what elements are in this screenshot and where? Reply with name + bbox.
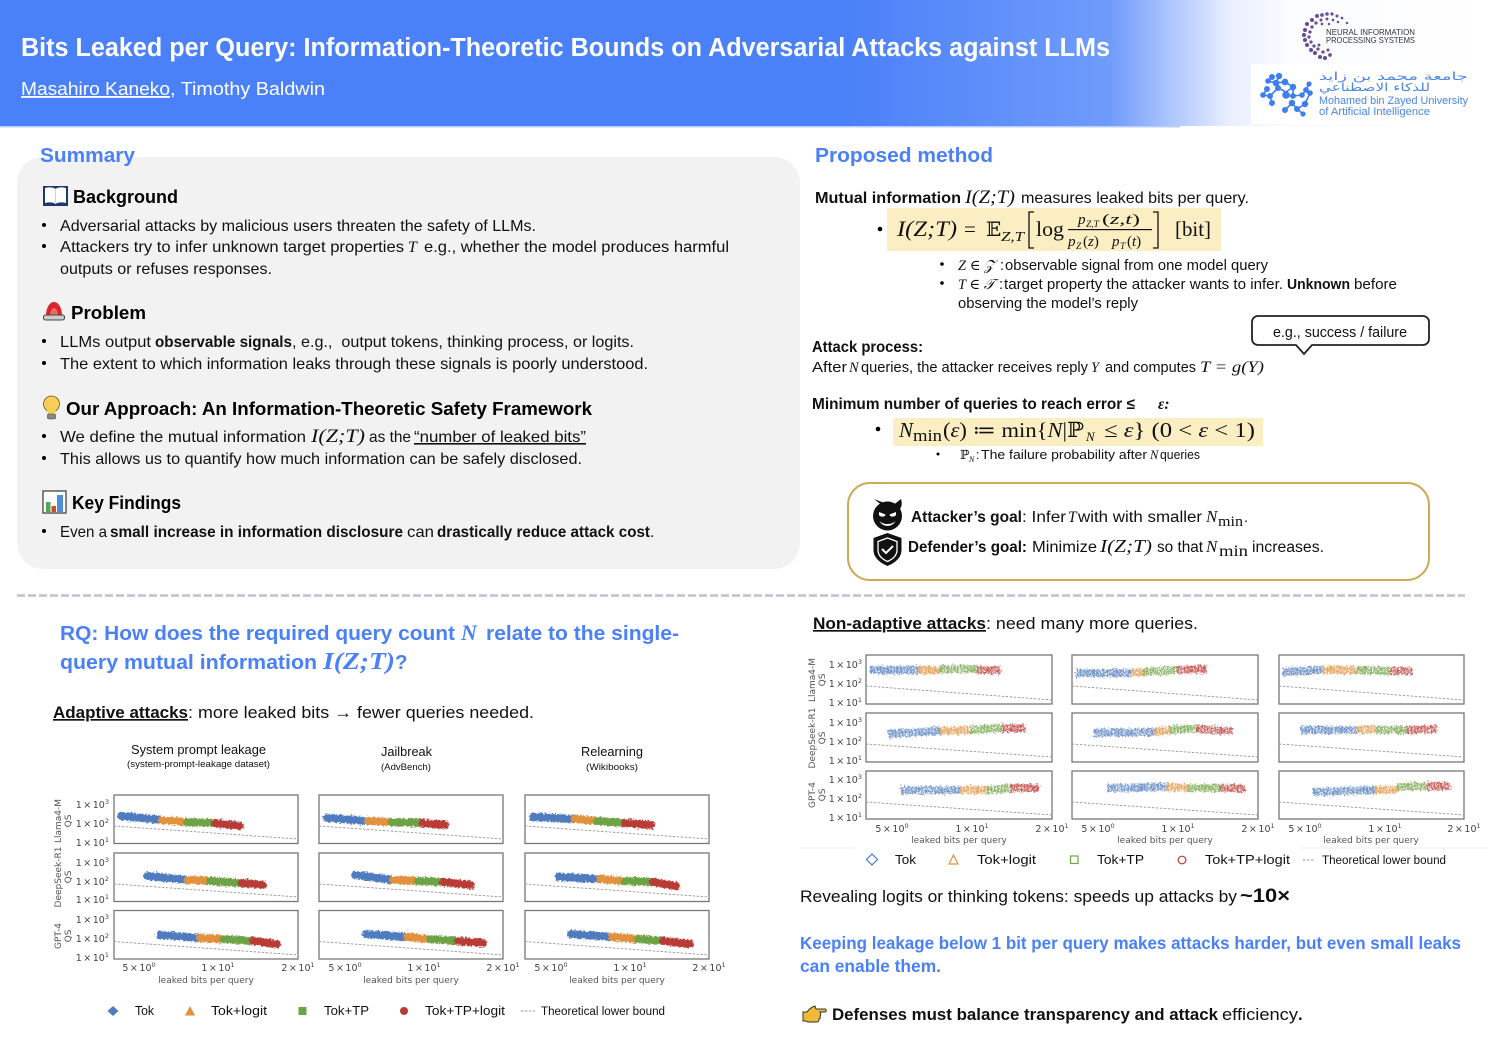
findings text [42,524,654,541]
research question: query mutual information [60,651,317,674]
x axis titles [158,976,665,986]
chart: adaptive attacks [54,742,726,1018]
x axis tick labels [875,822,1481,835]
failure probability note: N [1149,448,1159,462]
x axis tick labels: 1 × 10 [201,963,230,974]
x axis tick labels: 1 × 10 [955,824,984,835]
x axis titles: leaked bits per query [1323,836,1419,846]
icon: devil [873,499,902,530]
approach text: I(Z;T) [310,426,365,447]
defender goal [908,536,1324,560]
legend: Theoretical lower bound [1322,855,1446,867]
x axis tick labels: 1 [722,961,726,969]
goals box [848,483,1429,580]
formula: mutual information: [bit] [1175,217,1211,241]
x axis tick labels: 2 × 10 [692,963,722,974]
background text: outputs or refuses responses. [60,261,272,278]
icon: pointing hand [803,1006,826,1022]
icon: shield [874,533,902,566]
y axis tick labels: 1 [858,696,862,704]
panel: proposed method [812,145,1429,580]
research question: relate to the single- [486,622,679,645]
research question: ? [395,651,408,674]
minimum number of queries heading: Minimum number of queries to reach error ≤ [812,396,1135,413]
row labels: QS [818,673,828,686]
formula: minimum queries: (ε) ≔ min{ N|ℙ [943,418,1084,442]
defender goal: Minimize [1032,539,1097,556]
research question [60,620,679,675]
y axis tick labels: 3 [105,913,109,921]
finding: leakage threshold [800,933,1461,976]
logo: NeurIPS: NEURAL INFORMATION [1326,27,1415,37]
panel: summary [17,145,800,569]
legend: Tok+logit [211,1004,268,1018]
y axis tick labels: 1 × 10 [76,800,105,811]
formula: mutual information: Z,T [1001,230,1025,245]
attack process: After [812,360,847,376]
logo: MBZUAI: of Artificial Intelligence [1319,106,1430,118]
y axis tick labels: 1 × 10 [76,953,105,964]
row labels: QS [818,788,828,801]
attacker goal: N [1205,507,1219,526]
defender goal: I(Z;T) [1099,536,1152,557]
row labels [808,658,828,808]
row labels: QS [64,929,74,942]
finding: defenses: Defenses must balance transparency and attack [832,1005,1219,1024]
problem text: The extent to which information leaks through these signals is poorly understood. [60,356,648,373]
y axis tick labels: 1 × 10 [76,915,105,926]
icon: bar chart [43,491,66,513]
finding: defenses: efficiency [1222,1005,1299,1024]
y axis tick labels: 3 [858,773,862,781]
legend [108,1004,665,1018]
x axis tick labels: 1 [642,961,647,969]
problem text: observable signals [155,334,292,351]
x axis tick labels: 0 [1110,822,1115,830]
x axis tick labels: 1 × 10 [1368,824,1398,835]
x axis tick labels: 1 × 10 [1161,824,1190,835]
legend: Tok+TP [1097,853,1144,867]
y axis tick labels: 2 [858,735,862,743]
legend: Tok+TP+logit [1205,853,1291,867]
y axis tick labels: 1 × 10 [829,718,858,729]
x axis tick labels [122,961,726,974]
attacker goal: Attacker’s goal [911,509,1022,526]
column titles: System prompt leakage [131,742,266,757]
research question: N [460,620,478,645]
defender goal: so that [1157,539,1204,556]
definitions of Z and T: Z ∈ 𝒵 [958,258,999,274]
adaptive attacks heading: Adaptive attacks [53,703,188,722]
problem text: , e.g., output tokens, thinking process, or logits. [292,334,634,351]
y axis tick labels: 1 × 10 [829,756,858,767]
mutual information intro [815,188,1249,208]
y axis tick labels: 1 [105,893,109,901]
formula: mutual information: (z) [1083,234,1099,250]
attack process: Y [1091,360,1101,376]
background text: Adversarial attacks by malicious users threaten the safety of LLMs. [60,218,536,235]
title: Bits Leaked per Query: Information-Theoretic Bounds on Adversarial Attacks against LLMs [21,34,1110,62]
finding: defenses: . [1298,1005,1303,1024]
x axis tick labels: 1 [1190,822,1195,830]
row labels: QS [64,870,74,883]
findings text: Even a [60,524,107,541]
defender goal: increases. [1252,539,1324,556]
y axis tick labels: 1 × 10 [76,819,105,830]
y axis tick labels: 1 [858,811,862,819]
formula: mutual information: Z,T [1086,220,1100,230]
definitions of Z and T: : [999,277,1003,293]
legend [866,853,1446,867]
attack process: N [848,360,860,376]
x axis tick labels: 2 × 10 [1241,824,1270,835]
x axis tick labels: 2 × 10 [1447,824,1476,835]
formula: mutual information: (t) [1127,234,1141,250]
attacker goal: : Infer [1022,509,1066,526]
plot frames [114,795,709,959]
definitions of Z and T: : [1000,258,1004,274]
approach text: as the [369,429,411,446]
row labels: QS [818,731,828,744]
y axis tick labels: 3 [105,856,109,864]
x axis tick labels: 5 × 10 [328,963,358,974]
failure probability note [936,448,1200,464]
attack process [812,339,1264,376]
x axis tick labels: 1 [436,961,441,969]
column titles: Jailbreak [381,744,432,759]
definitions of Z and T: Unknown [1287,277,1350,293]
data series: hollow markers [870,669,1451,792]
x axis tick labels: 1 × 10 [613,963,642,974]
row labels: DeepSeek-R1 [808,708,818,768]
x axis tick labels: 2 × 10 [281,963,310,974]
y axis tick labels: 1 × 10 [829,794,858,805]
y axis tick labels: 1 [105,951,109,959]
y axis tick labels: 3 [105,798,109,806]
y axis tick labels: 1 × 10 [829,737,858,748]
x axis tick labels: 0 [1318,822,1322,830]
formula: mutual information: T [1120,242,1126,252]
finding: leakage threshold: can enable them. [800,956,941,976]
column titles [127,742,643,773]
findings text: can [407,524,434,541]
failure probability note: ℙ [960,448,970,462]
attack process: T = g(Y) [1200,359,1264,376]
findings text: . [650,524,654,541]
formula: mutual information [878,208,1221,252]
y axis tick labels: 2 [105,817,109,825]
formula: mutual information: p [1067,234,1076,250]
attack process: queries, the attacker receives reply [861,360,1089,376]
column titles: Relearning [581,744,643,759]
problem text [42,334,648,373]
x axis tick labels: 1 [230,961,235,969]
adaptive attacks heading: : more leaked bits → fewer queries needed. [188,703,534,722]
x axis tick labels: 0 [152,961,156,969]
authors [21,78,325,99]
icon: book [43,186,68,206]
icon: siren [44,302,64,320]
x axis tick labels: 5 × 10 [1288,824,1318,835]
findings text: small increase in information disclosure [110,524,403,541]
attacker goal: T [1068,509,1078,526]
column titles: (system-prompt-leakage dataset) [127,759,270,770]
y axis tick labels: 1 × 10 [76,858,105,869]
row labels: QS [64,814,74,827]
chart: non-adaptive attacks [800,655,1488,867]
legend: Tok [135,1004,155,1018]
formula: mutual information: (z,t ) [1102,212,1140,228]
failure probability note: The failure probability after [981,448,1147,462]
x axis tick labels: 2 × 10 [486,963,516,974]
attacker goal: with with smaller [1077,509,1202,526]
problem text: LLMs output [60,334,152,351]
row labels [54,799,74,949]
logo: NeurIPS [1302,13,1415,60]
x axis tick labels: 2 × 10 [1035,824,1064,835]
y axis tick labels: 1 × 10 [829,698,858,709]
y axis tick labels: 2 [858,677,862,685]
x axis tick labels: 1 [1270,822,1275,830]
column titles: (AdvBench) [381,762,431,773]
x axis titles: leaked bits per query [158,976,254,986]
background text: Attackers try to infer unknown target properties [60,239,404,256]
mutual information intro: measures leaked bits per query. [1021,190,1249,207]
non-adaptive attacks heading [813,614,1198,633]
y axis tick labels: 1 × 10 [76,838,105,849]
x axis tick labels: 1 [1398,822,1402,830]
formula: mutual information: p [1111,234,1120,250]
x axis tick labels: 1 × 10 [407,963,436,974]
x axis tick labels: 1 [1476,822,1481,830]
y axis tick labels: 3 [858,658,862,666]
attacker goal: min [1218,514,1244,530]
attack process: and computes [1105,360,1196,376]
research question: RQ: How does the required query count [60,622,455,645]
x axis titles [911,836,1419,846]
logo: MBZUAI: للذكاء الاصطناعي [1319,81,1430,94]
definitions of Z and T: before [1354,277,1397,293]
x axis tick labels: 0 [564,961,568,969]
x axis titles: leaked bits per query [569,976,665,986]
authors: Masahiro Kaneko [21,78,170,99]
formula: minimum queries: N [898,418,914,442]
defender goal: Defender’s goal: [908,539,1027,556]
y axis tick labels: 3 [858,716,862,724]
x axis tick labels: 5 × 10 [875,824,904,835]
x axis titles: leaked bits per query [363,976,459,986]
y axis tick labels: 2 [858,792,862,800]
logo: MBZUAI [1251,64,1480,124]
minimum number of queries heading: ε: [1158,396,1170,413]
x axis tick labels: 5 × 10 [1081,824,1110,835]
adaptive attacks heading [53,703,534,722]
findings text: drastically reduce attack cost [437,524,651,541]
logo: MBZUAI: Mohamed bin Zayed University [1319,95,1469,107]
attacker goal [911,507,1248,530]
x axis tick labels: 1 [1064,822,1069,830]
formula: minimum queries: min [913,426,943,445]
approach text [42,426,586,468]
column titles: (Wikibooks) [586,762,638,773]
y axis tick labels: 1 × 10 [829,660,858,671]
theoretical lower bound lines [866,686,1464,815]
formula: mutual information: Z [1076,242,1082,252]
non-adaptive attacks heading: Non-adaptive attacks [813,614,986,633]
y axis tick labels: 1 × 10 [829,775,858,786]
legend: Theoretical lower bound [541,1006,665,1018]
definitions of Z and T [940,258,1397,312]
y axis tick labels: 1 × 10 [829,813,858,824]
icon: light bulb [44,396,60,419]
defender goal: N [1205,537,1219,556]
heading: proposed method: Proposed method [815,145,993,167]
x axis tick labels: 5 × 10 [534,963,564,974]
formula: minimum queries: N [1085,429,1096,444]
formula: minimum queries [876,418,1263,446]
formula: minimum queries: ≤ ε} (0 < ε < 1) [1104,418,1255,442]
row labels: GPT-4 [808,782,818,808]
mutual information intro: Mutual information [815,190,961,207]
background text: e.g., whether the model produces harmful [424,239,729,256]
legend: Tok+TP [324,1004,369,1018]
formula: mutual information: 𝔼 [986,219,1001,241]
theoretical lower bound lines [114,826,709,955]
heading: key findings: Key Findings [72,492,181,513]
definitions of Z and T: observing the model’s reply [958,296,1139,312]
y axis tick labels [829,658,862,824]
defender goal: min [1219,543,1248,560]
y axis tick labels: 1 × 10 [829,679,858,690]
formula: mutual information: = [964,217,976,241]
legend: Tok [895,853,917,867]
definitions of Z and T: T ∈ 𝒯 [958,277,1000,293]
approach text: We define the mutual information [60,429,306,446]
non-adaptive attacks heading: : need many more queries. [986,614,1198,633]
x axis tick labels: 1 [310,961,315,969]
formula: mutual information: I(Z;T) [896,216,957,241]
mutual information intro: I(Z;T) [964,188,1015,208]
approach text: This allows us to quantify how much information can be safely disclosed. [60,451,582,468]
heading: problem: Problem [71,302,146,323]
x axis titles: leaked bits per query [911,836,1007,846]
attacker goal: . [1244,510,1248,526]
y axis tick labels: 1 [858,754,862,762]
y axis tick labels: 2 [105,875,109,883]
logo: MBZUAI: جامعة محمد بن زايد [1319,70,1468,83]
plot frames [866,655,1464,819]
finding: speed up: Revealing logits or thinking tokens: speeds up attacks by [800,887,1238,906]
y axis tick labels [76,798,109,964]
y axis tick labels: 1 [105,836,109,844]
data series: tok, tok+logit, tok+tp, tok+tp+logit [121,816,690,944]
header banner [0,0,1500,128]
attack process: Attack process: [812,339,923,356]
finding: speed up: ~10× [1240,886,1290,907]
formula: mutual information: p [1077,212,1086,228]
research question: I(Z;T) [322,649,395,675]
legend: Tok+logit [977,853,1037,867]
legend: Tok+TP+logit [425,1004,506,1018]
finding: leakage threshold: Keeping leakage below 1 bit per query makes attacks harder, but even small leaks [800,933,1461,953]
callout: success or failure: e.g., success / failure [1273,325,1407,341]
x axis titles: leaked bits per query [1117,836,1213,846]
row labels: Llama4-M [808,658,818,702]
y axis tick labels: 1 × 10 [76,934,105,945]
failure probability note: : [976,448,979,462]
definitions of Z and T: target property the attacker wants to infer. [1004,277,1283,293]
authors: , Timothy Baldwin [170,78,325,99]
background text: T [408,239,418,256]
background text [42,218,729,278]
heading: summary: Summary [40,145,136,167]
heading: background: Background [73,186,178,207]
failure probability note: N [968,455,975,464]
x axis tick labels: 1 [984,822,989,830]
y axis tick labels: 1 × 10 [76,877,105,888]
logo: NeurIPS: PROCESSING SYSTEMS [1326,35,1415,45]
row labels: GPT-4 [54,923,64,949]
formula: mutual information: log [1036,217,1065,241]
x axis tick labels: 0 [358,961,362,969]
x axis tick labels: 0 [904,822,909,830]
definitions of Z and T: observable signal from one model query [1005,258,1269,274]
x axis tick labels: 1 [516,961,520,969]
failure probability note: queries [1160,448,1200,462]
x axis tick labels: 5 × 10 [122,963,152,974]
heading: our approach: Our Approach: An Information-Theoretic Safety Framework [66,398,593,419]
callout: success or failure [1252,316,1429,354]
row labels: DeepSeek-R1 [54,847,64,907]
y axis tick labels: 1 × 10 [76,895,105,906]
y axis tick labels: 2 [105,932,109,940]
row labels: Llama4-M [54,799,64,843]
approach text: “number of leaked bits” [414,429,586,446]
